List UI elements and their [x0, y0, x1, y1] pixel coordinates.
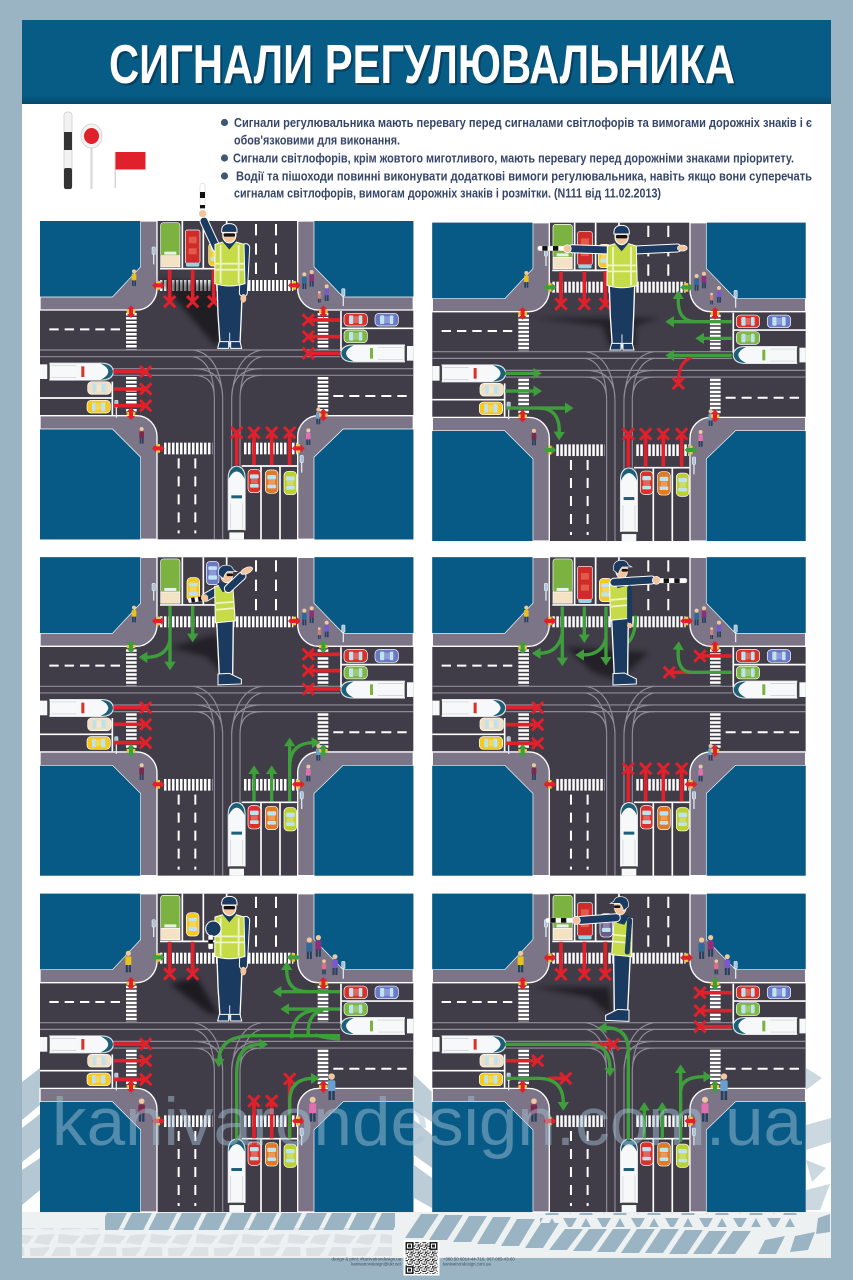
red stop arrows [506, 650, 732, 802]
green go arrows [146, 606, 313, 802]
pedestrian signals [518, 283, 719, 454]
officer with arms outstretched [538, 225, 687, 350]
panel: signal 4, arm forward with baton [430, 557, 809, 878]
officer side view, baton to the left [546, 897, 632, 1021]
icon: baton, signal disc and flag [64, 112, 146, 189]
panel: signal 6, baton pointing left [430, 894, 809, 1214]
green go arrows [505, 298, 732, 433]
panel: signal 1, arm raised, all stop [38, 183, 416, 542]
watermark: kanivarondesign.com.ua [52, 1084, 802, 1160]
green go arrows [505, 1028, 704, 1142]
pedestrian signals [518, 617, 719, 789]
pedestrian signals [127, 281, 328, 453]
imprint left: kanivatrondesign@ukr.net [351, 1262, 402, 1266]
red stop arrows [113, 942, 295, 1138]
officer side view, arm raised [188, 565, 254, 685]
red stop arrows [555, 271, 692, 467]
pedestrian signals [518, 953, 719, 1125]
imprint left: design & print: #kanivatrondesign.ua [331, 1256, 402, 1262]
green go arrows [219, 969, 340, 1140]
rules text block: обов'язковими для виконання. [234, 134, 400, 148]
red stop arrows [506, 942, 732, 1084]
imprint right [443, 1256, 515, 1266]
rules text block [221, 116, 812, 200]
panel: signal 3, arm forward over chest [38, 557, 416, 878]
green go arrows [540, 607, 732, 672]
red stop arrows [113, 269, 340, 465]
officer side view, baton forward [610, 560, 687, 685]
red stop arrows [113, 649, 340, 748]
QR code [404, 1240, 440, 1276]
imprint right: +380 50 6014-44-716, 067-085-43-60 [443, 1256, 515, 1262]
pedestrian signals [127, 617, 328, 789]
title banner [22, 20, 831, 104]
imprint left [331, 1256, 402, 1266]
imprint right: kanivatrondesign.com.ua [443, 1262, 491, 1266]
rules text block: сигналам світлофорів, вимогам дорожніх знаків і розмітки. (N111 від 11.02.2013) [234, 186, 661, 200]
panel: signal 2, arms to the sides [430, 223, 809, 543]
pedestrian signals [127, 953, 328, 1125]
officer with raised baton [199, 183, 246, 348]
tyre track decoration [22, 1068, 831, 1258]
officer holding baton at chest [206, 896, 246, 1021]
panel: signal 5, baton held at chest [38, 894, 416, 1214]
